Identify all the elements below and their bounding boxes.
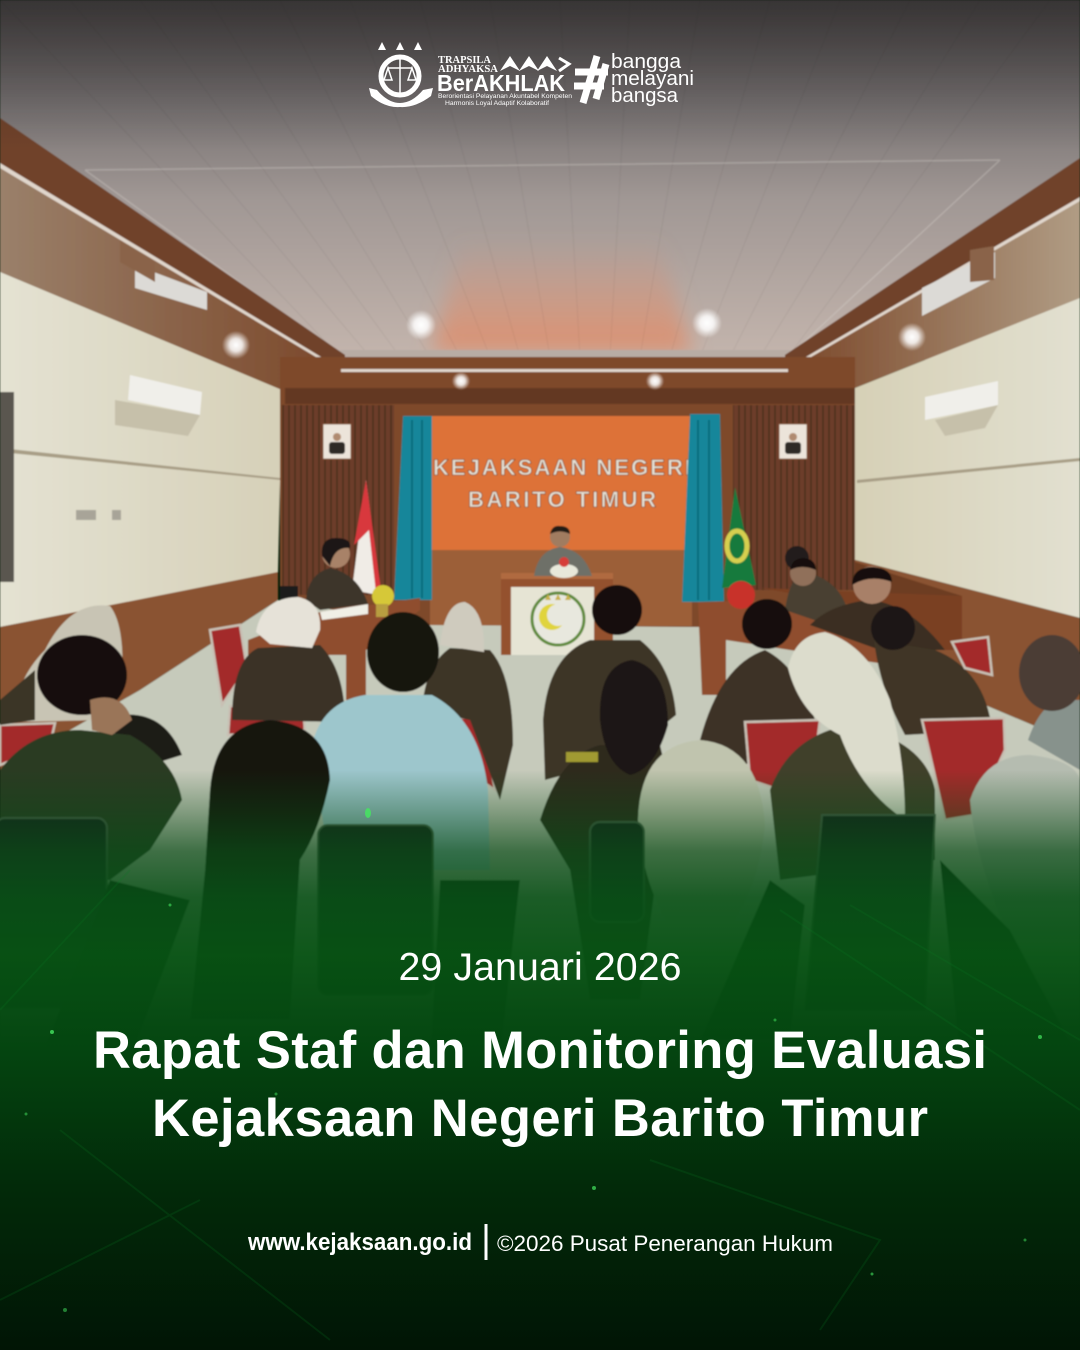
chair backs in foreground: [0, 815, 935, 1010]
wordmark: Trapsila Adhyaksa: ADHYAKSA: [438, 64, 498, 75]
orange name wall with sign: BARITO TIMUR: [468, 487, 656, 512]
AKHLAK values tagline: [438, 94, 572, 107]
tagline: bangga melayani bangsa: bangga: [611, 51, 682, 73]
orange name wall with sign: KEJAKSAAN NEGERI: [433, 455, 691, 480]
footer copyright: ©2026 Pusat Penerangan Hukum: [497, 1231, 833, 1256]
flags: [352, 480, 756, 595]
background photo: meeting room: [0, 0, 1080, 1060]
meeting tables: [248, 588, 962, 700]
emblem: Kejaksaan crest: [369, 42, 433, 107]
title: Rapat Staf dan Monitoring Evaluasi: [93, 1021, 987, 1080]
tagline: bangga melayani bangsa: melayani: [611, 68, 694, 90]
teal curtains: [394, 414, 724, 602]
ceiling: [0, 0, 1080, 360]
AKHLAK values tagline: Harmonis Loyal Adaptif Kolaboratif: [445, 101, 549, 107]
orange name wall with sign: [430, 416, 693, 626]
tagline: bangga melayani bangsa: [611, 51, 694, 107]
footer divider: [484, 1224, 488, 1260]
logo group: Trapsila Adhyaksa, BerAKHLAK, bangga melayani bangsa: [369, 42, 694, 107]
glowing green particles: [24, 808, 1042, 1312]
audience: front row left: [0, 635, 330, 1020]
left wall: [0, 118, 345, 770]
green gradient overlay: [0, 770, 1080, 1350]
audience: right side: [638, 632, 1080, 940]
staff at right tables: [700, 546, 992, 765]
podium with emblem: [501, 573, 613, 655]
title: [93, 1021, 987, 1148]
wordmark: BerAKHLAK: BerAKHLAK: [437, 70, 565, 96]
red chairs: [0, 625, 1005, 820]
audience: centre: [312, 585, 676, 1000]
seated staff at left desk: [280, 538, 368, 610]
wordmark: Trapsila Adhyaksa: TRAPSILA: [438, 55, 491, 66]
floor: [0, 600, 1080, 1060]
footer website: www.kejaksaan.go.id: [247, 1229, 472, 1256]
audience: left side: [0, 597, 345, 765]
date: 29 Januari 2026: [398, 945, 682, 989]
tagline: bangga melayani bangsa: bangsa: [611, 85, 679, 107]
wordmark: Trapsila Adhyaksa: [438, 55, 498, 75]
AKHLAK values tagline: Berorientasi Pelayanan Akuntabel Kompeten: [438, 94, 572, 100]
speaker: [534, 526, 592, 578]
dark lower-body silhouettes: [40, 860, 1080, 1060]
back wall: [280, 357, 855, 627]
framed portraits: [323, 424, 807, 459]
top dark vignette: [0, 0, 1080, 150]
right wall: [785, 158, 1080, 745]
faint diagonal streaks: [0, 870, 1080, 1340]
title: Kejaksaan Negeri Barito Timur: [152, 1089, 928, 1148]
hash symbol: [574, 56, 608, 103]
AKHLAK peaks and chevron: [500, 56, 569, 71]
flower arrangements: [372, 581, 755, 617]
